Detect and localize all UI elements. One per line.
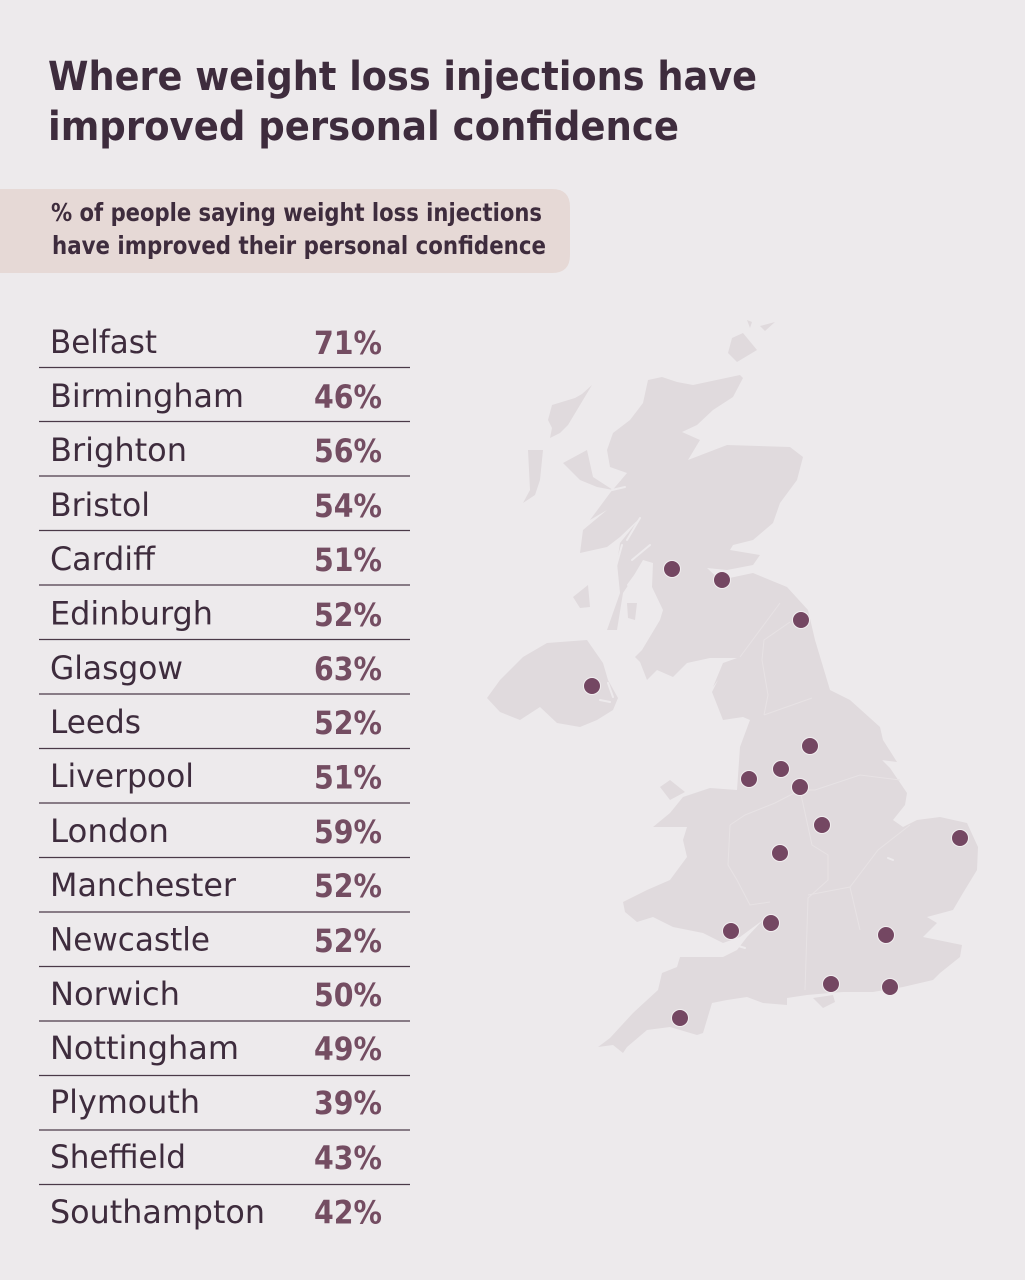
row: Belfast [39,323,410,368]
dot: Sheffield [792,778,808,796]
row: Norwich: Norwich [50,975,180,1013]
dot: Leeds [802,738,818,754]
row: Liverpool [39,757,410,803]
row: Sheffield: 43% [314,1139,382,1177]
row: Belfast: Belfast [50,323,157,361]
row: Birmingham: Birmingham [50,377,244,415]
row: Manchester [39,866,410,912]
subtitle banner: have improved their personal confidence [52,231,546,260]
map: Great Britain mainland [580,375,978,1053]
row: Liverpool: 51% [314,758,382,796]
row: Southampton: Southampton [50,1193,265,1231]
row: Leeds [39,703,410,748]
dot: Southampton [822,976,840,992]
row: London [39,812,410,858]
dot: London [878,926,894,944]
dot: Liverpool [740,770,758,788]
title: Where weight loss injections have [48,54,757,100]
row: Brighton: 56% [314,432,382,470]
dot: Brighton [882,978,898,996]
row: Edinburgh: Edinburgh [50,594,213,632]
row: Leeds: Leeds [50,703,141,741]
row: Newcastle: Newcastle [50,920,210,958]
row: Newcastle [39,920,410,966]
dot: Norwich [952,830,968,846]
dot: Edinburgh [714,572,730,588]
row: Edinburgh [39,594,410,640]
row: Birmingham: 46% [314,378,382,416]
row: Glasgow [39,649,410,694]
row: Glasgow: Glasgow [50,649,183,687]
row: Brighton [39,431,410,476]
row: Plymouth [39,1083,410,1130]
UK map [487,320,978,1053]
map: Northern Ireland [487,640,618,727]
row: Norwich: 50% [314,976,382,1014]
row: Southampton [50,1193,382,1232]
subtitle banner: % of people saying weight loss injections [51,198,542,227]
row: London: London [50,812,169,850]
row: Leeds: 52% [314,704,382,742]
row: Cardiff [39,540,410,585]
data table: city percentages [39,323,410,1232]
row: Cardiff: Cardiff [50,540,156,578]
dot: Birmingham [772,844,788,862]
dot: Belfast [584,678,600,694]
map: Outer Hebrides and islands [523,320,835,1008]
dot: Cardiff [722,922,740,940]
row: Liverpool: Liverpool [50,757,194,795]
row: Nottingham [39,1029,410,1076]
row: London: 59% [314,813,382,851]
dot: Newcastle [792,612,810,628]
row: Manchester: Manchester [50,866,237,904]
row: Newcastle: 52% [314,922,382,960]
row: Sheffield: Sheffield [50,1138,186,1176]
map: region borders [728,603,910,990]
row: Edinburgh: 52% [314,596,382,634]
row: Plymouth: Plymouth [50,1083,200,1121]
row: Birmingham [39,377,410,422]
row: Belfast: 71% [314,324,382,362]
row: Cardiff: 51% [314,541,382,579]
row: Glasgow: 63% [314,650,382,688]
dot: Bristol [762,914,780,932]
row: Nottingham: Nottingham [50,1029,239,1067]
dot: Manchester [772,760,790,778]
row: Manchester: 52% [314,867,382,905]
row: Sheffield [39,1138,410,1184]
dot: Glasgow [664,560,680,578]
subtitle banner [0,189,570,273]
row: Southampton: 42% [314,1194,382,1232]
row: Bristol [39,486,410,530]
row: Norwich [39,975,410,1021]
map: coastal inlets [600,473,893,948]
dot: Nottingham [814,816,830,834]
dot: Plymouth [672,1010,688,1026]
row: Brighton: Brighton [50,431,187,469]
title [48,54,757,150]
row: Bristol: Bristol [50,486,150,524]
row: Plymouth: 39% [314,1084,382,1122]
row: Bristol: 54% [314,487,382,525]
title: improved personal confidence [48,104,679,150]
row: Nottingham: 49% [314,1030,382,1068]
